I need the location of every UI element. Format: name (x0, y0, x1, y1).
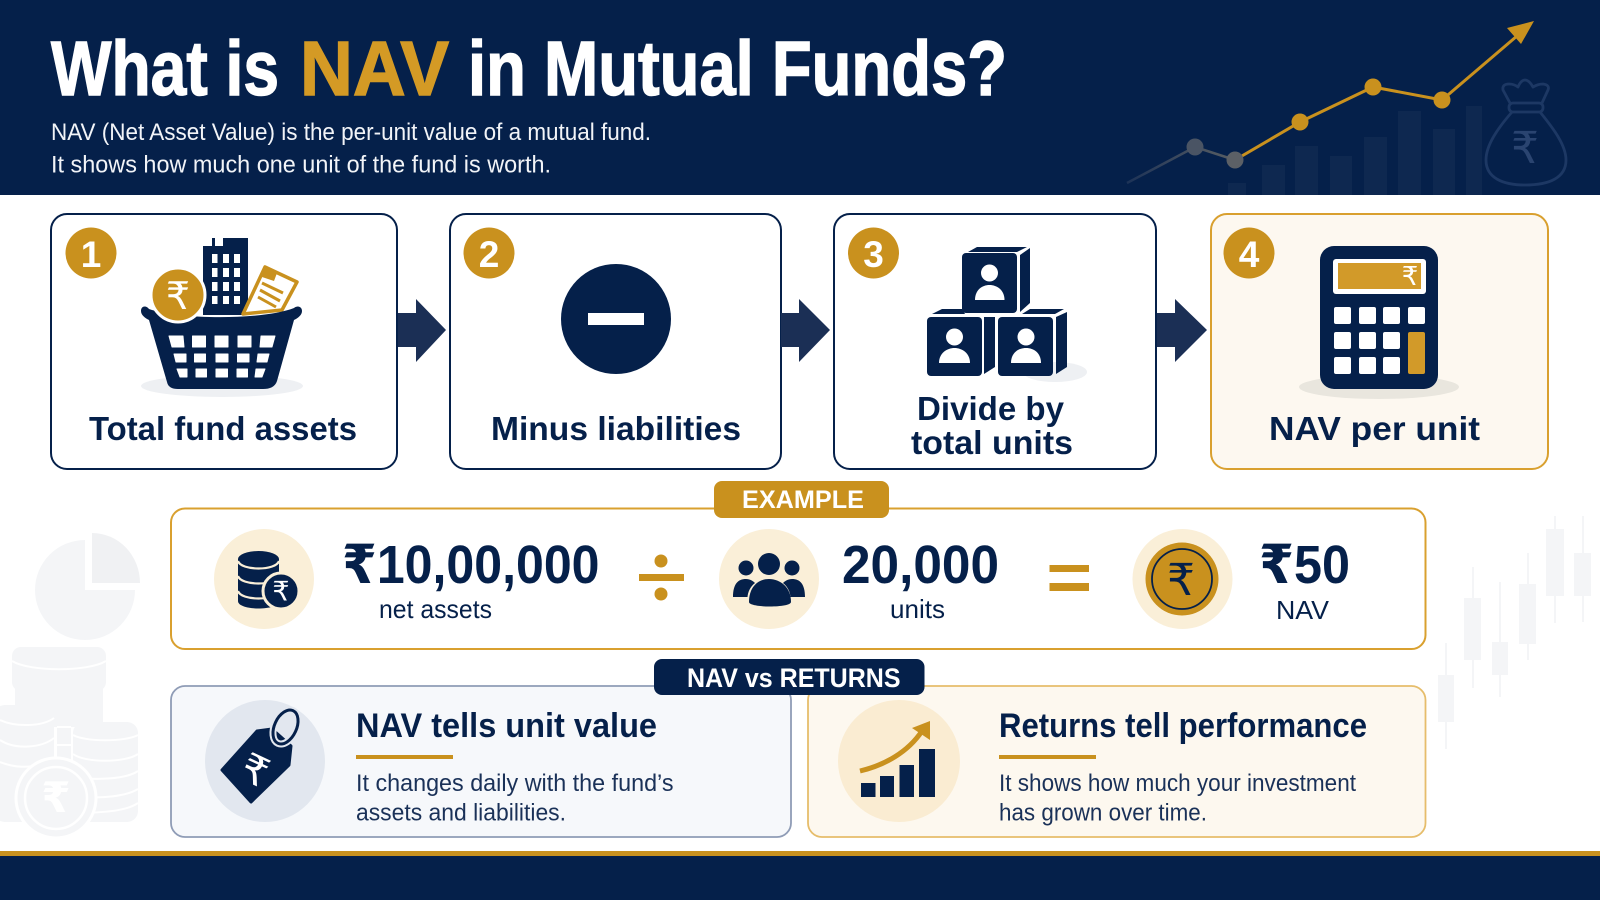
step 4 card: NAV per unit (1211, 214, 1548, 469)
NAV value: NAV (1276, 595, 1330, 625)
panel body text: It changes daily with the fund’s (356, 770, 674, 797)
icon: rupee coin (1132, 529, 1232, 629)
step 3 label: Divide by (917, 391, 1064, 428)
example badge (714, 481, 889, 518)
panel body text (356, 770, 674, 826)
background watermark: pie and coins: ₹ (41, 774, 71, 821)
subtitle: NAV (Net Asset Value) is the per-unit value of a mutual fund. (51, 119, 651, 146)
step 1 label: Total fund assets (89, 411, 357, 448)
title (51, 26, 1007, 112)
example panel (171, 481, 1426, 649)
icon: money bag outline (1486, 80, 1566, 185)
step 3 label: total units (911, 425, 1073, 462)
step 2 number badge: 2 (479, 234, 499, 275)
step 3 number badge (848, 228, 899, 278)
units value: units (890, 594, 945, 624)
NAV vs returns badge: NAV vs RETURNS (687, 663, 900, 693)
title: What is (51, 26, 279, 112)
units value (842, 535, 999, 624)
step 4 number badge: 4 (1239, 234, 1260, 275)
header growth chart decoration (1127, 21, 1534, 195)
icon: calculator (1299, 246, 1459, 399)
subtitle (51, 119, 651, 178)
step 1 number badge (66, 228, 116, 278)
arrow 1 (398, 299, 446, 362)
arrow 2 (781, 299, 830, 362)
icon: growth bars with arrow (838, 700, 960, 822)
panel body text (999, 770, 1356, 826)
icon: database with rupee coin: ₹ (272, 576, 290, 606)
icon: database with rupee coin (214, 529, 314, 629)
icon: calculator: ₹ (1402, 261, 1418, 291)
example badge: EXAMPLE (742, 486, 864, 514)
step 3 card: divide by total units (834, 214, 1156, 469)
step 2 card: minus liabilities (450, 214, 781, 469)
icon: price tag: ₹ (234, 746, 275, 796)
header band (0, 0, 1600, 195)
step 4 number badge (1224, 228, 1274, 278)
step 3 label (911, 391, 1073, 462)
net assets value: net assets (379, 594, 492, 624)
step 1 card: total fund assets (51, 214, 397, 469)
icon: minus sign (561, 264, 671, 374)
background watermark: candlesticks (1438, 516, 1591, 749)
icon: rupee coin: ₹ (1167, 556, 1195, 605)
step 3 number badge: 3 (863, 234, 884, 275)
icon: unit blocks (927, 247, 1087, 382)
title: in Mutual Funds? (468, 26, 1007, 112)
step 2 label: Minus liabilities (491, 411, 741, 448)
NAV value (1259, 535, 1350, 625)
panel heading: NAV tells unit value (356, 707, 657, 745)
icon: basket of assets: ₹ (166, 276, 190, 318)
panel body text: has grown over time. (999, 800, 1207, 826)
icon: price tag (205, 700, 325, 822)
panel: NAV tells unit value (171, 686, 791, 837)
equals symbol (1050, 565, 1089, 591)
net assets value: ₹10,00,000 (342, 535, 600, 595)
icon: money bag outline: ₹ (1511, 124, 1539, 173)
units value: 20,000 (842, 535, 999, 595)
step 4 label: NAV per unit (1269, 411, 1480, 448)
panel: returns tell performance (808, 686, 1426, 837)
panel heading: Returns tell performance (999, 707, 1367, 745)
divide symbol (639, 554, 684, 600)
icon: basket of assets (141, 238, 303, 397)
footer band (0, 851, 1600, 900)
step 1 number badge: 1 (81, 234, 101, 275)
step 2 number badge (464, 228, 514, 278)
subtitle: It shows how much one unit of the fund is worth. (51, 152, 551, 178)
net assets value (342, 535, 600, 624)
title: NAV (300, 26, 449, 112)
icon: group of people (719, 529, 819, 629)
panel body text: assets and liabilities. (356, 800, 566, 826)
NAV value: ₹50 (1259, 535, 1350, 595)
arrow 3 (1157, 299, 1207, 362)
background watermark: pie and coins (0, 533, 140, 838)
panel body text: It shows how much your investment (999, 770, 1356, 797)
